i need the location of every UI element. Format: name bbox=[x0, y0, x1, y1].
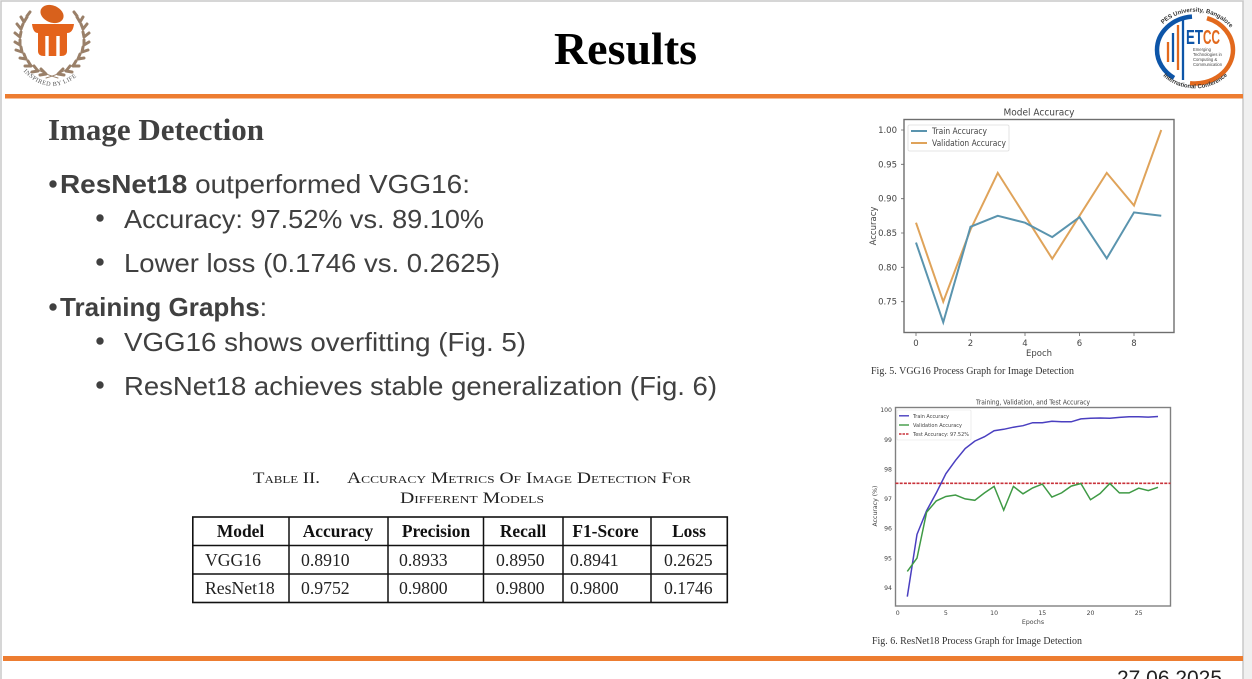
y axis labels: 100 bbox=[880, 407, 892, 414]
x axis labels: 4 bbox=[1022, 339, 1028, 349]
y axis labels: 99 bbox=[884, 437, 892, 444]
y axis labels: 96 bbox=[884, 526, 892, 533]
table caption bbox=[253, 470, 692, 507]
header row: Model bbox=[217, 521, 264, 541]
y axis labels: 0.85 bbox=[878, 229, 897, 239]
row: ResNet18: ResNet18 bbox=[205, 578, 275, 598]
x axis title: Epochs bbox=[1022, 619, 1044, 626]
conference subtitle: Technologies in bbox=[1193, 52, 1223, 57]
logo: inspired by life bbox=[13, 4, 91, 86]
y axis labels bbox=[878, 126, 897, 308]
table caption: Accuracy Metrics Of Image Detection For bbox=[347, 470, 692, 487]
table caption: Different Models bbox=[400, 490, 544, 507]
test accuracy reference line bbox=[896, 482, 1170, 484]
row: ResNet18: 0.9800 bbox=[496, 578, 545, 598]
title: Results bbox=[554, 23, 697, 74]
header row: Accuracy bbox=[303, 521, 374, 541]
y axis labels: 0.95 bbox=[878, 160, 897, 170]
sub-bullet: loss: Lower loss (0.1746 vs. 0.2625) bbox=[124, 248, 500, 278]
y axis labels: 1.00 bbox=[878, 126, 897, 136]
blue ring arc bbox=[1157, 17, 1192, 78]
legend: Validation Accuracy bbox=[913, 423, 963, 429]
row: VGG16: 0.8941 bbox=[570, 550, 619, 570]
caption: figure 5: Fig. 5. VGG16 Process Graph for Image Detection bbox=[871, 366, 1075, 377]
legend: Train Accuracy bbox=[912, 414, 950, 420]
row: VGG16 bbox=[205, 550, 713, 570]
conference subtitle bbox=[1193, 47, 1223, 67]
orange head bbox=[38, 2, 66, 26]
ETCC wordmark: CC bbox=[1203, 27, 1220, 49]
orange ring arc bbox=[1190, 18, 1233, 83]
legend: Test Accuracy: 97.52% bbox=[912, 432, 969, 438]
y axis labels: 0.80 bbox=[878, 263, 897, 273]
validation accuracy line bbox=[916, 130, 1161, 302]
table caption: Table II. bbox=[253, 470, 320, 487]
chart title: Model Accuracy bbox=[1004, 108, 1075, 118]
chart: VGG16 model accuracy bbox=[869, 108, 1174, 359]
header rule bbox=[5, 94, 1243, 98]
y axis labels: 97 bbox=[884, 496, 892, 503]
y axis labels: 0.75 bbox=[878, 298, 897, 308]
header row: Loss bbox=[672, 521, 706, 541]
legend: Train Accuracy bbox=[931, 127, 987, 137]
x axis labels: 0 bbox=[913, 339, 919, 349]
sub-bullet: accuracy: Accuracy: 97.52% vs. 89.10% bbox=[124, 204, 484, 234]
row: VGG16: 0.8950 bbox=[496, 550, 545, 570]
bullet: ResNet18: ResNet18 outperformed VGG16: bbox=[60, 169, 470, 199]
motto: INSPIRED BY LIFE bbox=[24, 68, 76, 86]
y axis title: Accuracy bbox=[869, 207, 879, 245]
row: ResNet18: 0.1746 bbox=[664, 578, 713, 598]
laurel left and right bbox=[15, 12, 89, 78]
bullet list bbox=[49, 169, 717, 401]
section heading: Image Detection bbox=[48, 112, 264, 147]
row: ResNet18: 0.9800 bbox=[399, 578, 448, 598]
x axis labels: 6 bbox=[1077, 339, 1082, 349]
x axis labels: 15 bbox=[1038, 610, 1046, 617]
conference subtitle: Emerging bbox=[1193, 47, 1212, 52]
y axis labels bbox=[880, 407, 892, 592]
conference subtitle: Computing & bbox=[1193, 57, 1217, 62]
train accuracy line bbox=[916, 212, 1161, 322]
ETCC wordmark: ET bbox=[1186, 27, 1203, 49]
footer rule bbox=[3, 656, 1243, 661]
y axis labels: 95 bbox=[884, 555, 892, 562]
header row: Precision bbox=[402, 521, 470, 541]
x axis labels: 2 bbox=[968, 339, 973, 349]
header row bbox=[217, 521, 706, 541]
row: VGG16: VGG16 bbox=[205, 550, 261, 570]
x axis labels: 20 bbox=[1087, 610, 1094, 617]
sub-bullet: ResNet18: ResNet18 achieves stable generalization (Fig. 6) bbox=[124, 371, 717, 401]
x axis title: Epoch bbox=[1026, 349, 1052, 359]
row: ResNet18: 0.9752 bbox=[301, 578, 350, 598]
signal bars bbox=[1167, 42, 1169, 62]
legend bbox=[897, 410, 971, 440]
header row: F1-Score bbox=[572, 521, 639, 541]
y axis title: Accuracy (%) bbox=[872, 486, 879, 526]
x axis labels: 25 bbox=[1135, 610, 1143, 617]
x axis labels bbox=[913, 339, 1137, 349]
ring text: conference: International Conference bbox=[1163, 73, 1227, 88]
x axis labels: 8 bbox=[1131, 339, 1137, 349]
y axis labels: 98 bbox=[884, 466, 892, 473]
row: ResNet18 bbox=[205, 578, 713, 598]
row: ResNet18: 0.9800 bbox=[570, 578, 619, 598]
legend: Validation Accuracy bbox=[932, 139, 1006, 149]
train accuracy line bbox=[907, 416, 1158, 597]
row: VGG16: 0.2625 bbox=[664, 550, 713, 570]
conference subtitle: Communication bbox=[1193, 62, 1223, 67]
y axis labels: 0.90 bbox=[878, 195, 897, 205]
logo: ETCC bbox=[1154, 7, 1236, 88]
x axis labels bbox=[896, 610, 1143, 617]
chart title: Training, Validation, and Test Accuracy bbox=[975, 398, 1090, 406]
caption: figure 6: Fig. 6. ResNet18 Process Graph for Image Detection bbox=[872, 636, 1083, 647]
orange pillar bbox=[32, 24, 74, 56]
bullet: training graphs: Training Graphs: bbox=[60, 292, 267, 322]
chart: ResNet18 accuracy bbox=[872, 398, 1170, 626]
legend bbox=[908, 125, 1009, 151]
x axis labels: 0 bbox=[896, 610, 900, 617]
validation accuracy line bbox=[907, 484, 1158, 571]
sub-bullet: VGG16: VGG16 shows overfitting (Fig. 5) bbox=[124, 327, 526, 357]
row: VGG16: 0.8933 bbox=[399, 550, 448, 570]
x axis labels: 10 bbox=[990, 610, 998, 617]
metrics table bbox=[192, 517, 728, 602]
x axis labels: 5 bbox=[944, 610, 948, 617]
y axis labels: 94 bbox=[884, 585, 892, 592]
right margin strip bbox=[1243, 0, 1252, 679]
header row: Recall bbox=[500, 521, 546, 541]
row: VGG16: 0.8910 bbox=[301, 550, 350, 570]
ring text: university: PES University, Bangalore bbox=[1160, 7, 1232, 28]
